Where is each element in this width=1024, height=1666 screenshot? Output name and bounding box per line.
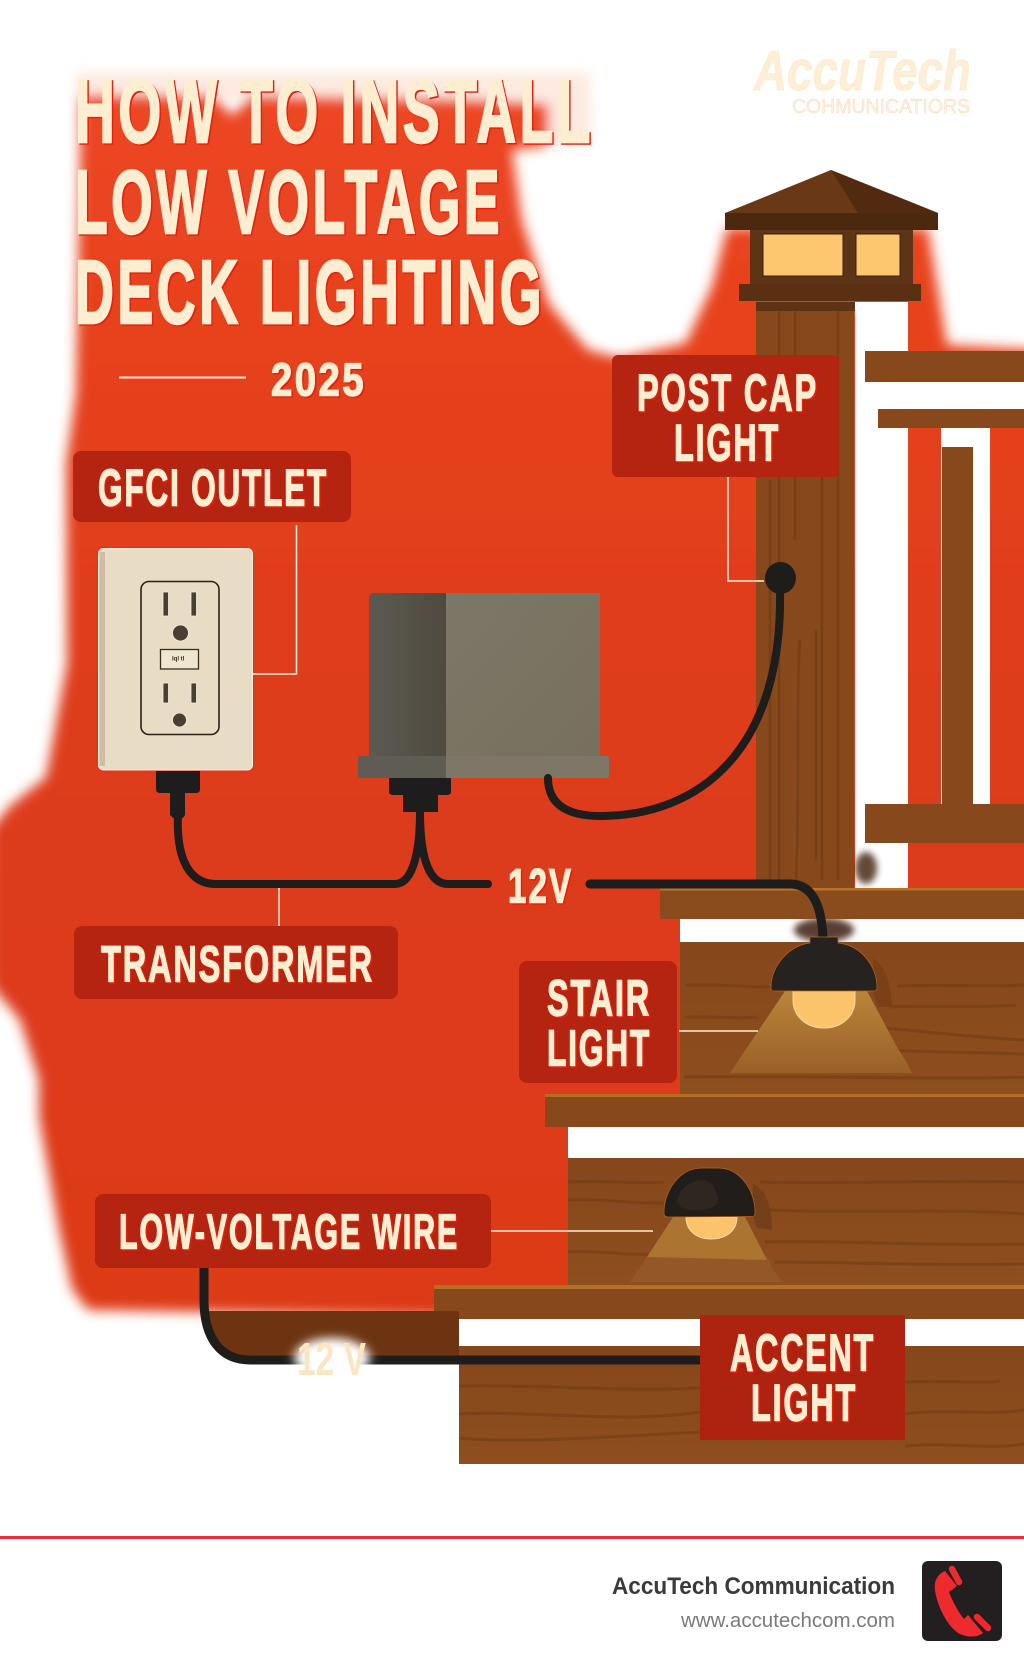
lantern body bbox=[750, 230, 913, 284]
roof dark side bbox=[831, 170, 938, 213]
brown under-step shadow bbox=[209, 1311, 459, 1358]
accent cone lower fade bbox=[630, 1257, 782, 1282]
lower slots and ground bbox=[163, 683, 196, 727]
transformer label: TRANSFORMER bbox=[101, 936, 374, 992]
shade bbox=[771, 937, 877, 991]
leader line: post cap bbox=[728, 477, 764, 581]
right window bbox=[856, 234, 900, 276]
wire to post cap light bbox=[548, 590, 780, 816]
footer rule bbox=[0, 1536, 1024, 1539]
leader line: stair bbox=[679, 1030, 758, 1032]
stair light label: STAIR bbox=[547, 970, 651, 1026]
stair light bbox=[730, 937, 912, 1073]
logo: AccuTech bbox=[752, 39, 971, 103]
leader line: GFCI outlet bbox=[253, 525, 296, 674]
roof bbox=[725, 170, 938, 213]
collar bbox=[756, 302, 855, 311]
year with rule: 2025 bbox=[271, 354, 366, 406]
light cone bbox=[730, 991, 912, 1073]
accent light label bbox=[700, 1315, 905, 1440]
dark smudge by post base bbox=[855, 852, 877, 884]
title bbox=[75, 62, 594, 343]
leader line: low-voltage wire bbox=[491, 1230, 653, 1232]
test button bbox=[160, 650, 198, 669]
logo bbox=[752, 39, 971, 118]
footer website: www.accutechcom.com bbox=[680, 1610, 895, 1632]
step 3 tread bbox=[434, 1285, 1024, 1319]
title: LOW VOLTAGE bbox=[75, 153, 503, 253]
wires to junction bbox=[178, 812, 488, 884]
eave bbox=[725, 213, 938, 230]
upper slots and ground bbox=[163, 592, 196, 641]
post cap light label: LIGHT bbox=[674, 414, 780, 472]
handset bbox=[935, 1571, 983, 1637]
white glow behind lower 12V bbox=[294, 1338, 370, 1378]
low-voltage wire label bbox=[95, 1194, 491, 1268]
GFCI outlet label: GFCI OUTLET bbox=[98, 460, 328, 518]
shade highlight bbox=[677, 1180, 718, 1211]
stair light label bbox=[519, 961, 677, 1083]
railing: white openings bbox=[855, 302, 1024, 888]
accent light bbox=[630, 1168, 782, 1282]
mouthpiece bbox=[977, 1617, 988, 1628]
wire along the lowest step bbox=[204, 1268, 700, 1360]
earpiece bbox=[952, 1569, 959, 1582]
voltage label: 12V: 12V bbox=[508, 860, 573, 914]
plate left shading bbox=[100, 552, 105, 766]
base right bbox=[446, 756, 609, 778]
step 1 tread bbox=[660, 888, 1024, 919]
title: HOW TO INSTALL bbox=[75, 62, 594, 162]
accent light label: ACCENT bbox=[730, 1324, 875, 1382]
shade shadow bbox=[873, 958, 892, 1007]
post fixture dot bbox=[765, 562, 796, 594]
red blurred backdrop bbox=[0, 72, 1024, 1320]
right face bbox=[446, 593, 600, 757]
step 2: white gap and riser bbox=[568, 1127, 1024, 1285]
bulb bbox=[793, 991, 855, 1028]
footer company name: AccuTech Communication bbox=[612, 1573, 895, 1600]
step 1: white gap and riser bbox=[680, 918, 1024, 1094]
base bbox=[358, 756, 446, 778]
post cap lantern bbox=[725, 170, 938, 311]
transformer plug bbox=[389, 778, 451, 812]
lantern base bbox=[739, 284, 921, 301]
leader line: transformer bbox=[278, 888, 280, 926]
left window bbox=[763, 234, 843, 276]
step 2 tread bbox=[545, 1094, 1024, 1127]
accent shade bbox=[664, 1168, 755, 1217]
post cap light label: POST CAP bbox=[637, 364, 818, 422]
outer red edge bbox=[98, 548, 254, 771]
transformer bbox=[358, 593, 609, 812]
step 3: white gap and riser bbox=[459, 1319, 1024, 1464]
button marks: lql tl bbox=[172, 656, 185, 662]
receptacle bbox=[141, 582, 219, 734]
stair light label: LIGHT bbox=[547, 1020, 651, 1076]
transformer label bbox=[74, 926, 398, 999]
post cap light label bbox=[612, 355, 839, 477]
accent bulb bbox=[686, 1217, 737, 1239]
title: DECK LIGHTING bbox=[75, 243, 545, 343]
left face bbox=[369, 593, 446, 757]
railing: rails and baluster bbox=[865, 351, 1024, 843]
GFCI outlet bbox=[98, 548, 254, 771]
post bbox=[756, 302, 854, 890]
GFCI outlet label bbox=[73, 451, 351, 522]
logo: COHMUNICATIORS bbox=[792, 96, 970, 118]
accent shade shadow bbox=[752, 1183, 772, 1230]
low-voltage wire label: LOW-VOLTAGE WIRE bbox=[119, 1206, 459, 1260]
outlet plug bbox=[156, 771, 200, 818]
icon: phone bbox=[922, 1561, 1002, 1641]
accent light label: LIGHT bbox=[751, 1374, 857, 1432]
wire to stair light bbox=[590, 884, 823, 945]
wall plate bbox=[98, 548, 252, 770]
accent cone upper bbox=[647, 1217, 767, 1260]
voltage label: lower 12 V: 12 V bbox=[297, 1333, 366, 1385]
